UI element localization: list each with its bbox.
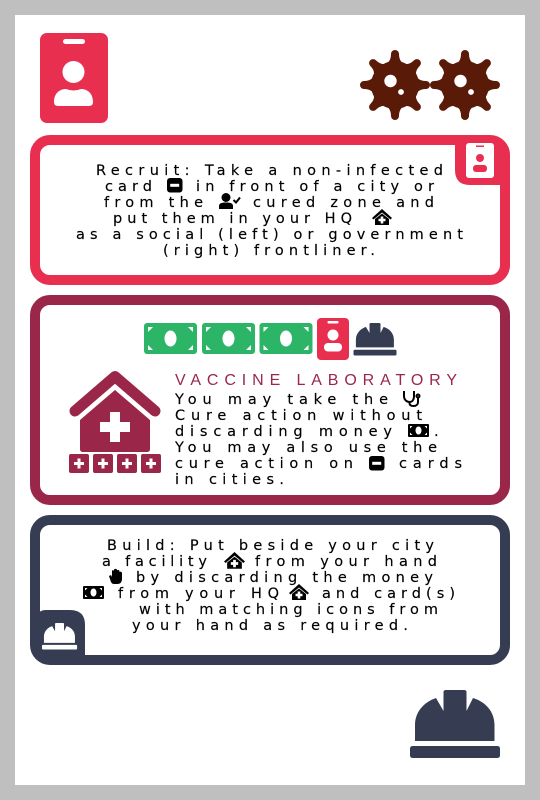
recruit text: Recruit: Take a non-infected (96, 163, 443, 179)
cost: helmet (354, 323, 397, 356)
panel: vaccine laboratory (35, 300, 505, 500)
recruit text: in front of a city or (196, 179, 434, 195)
recruit text: from the (104, 195, 203, 211)
panel: recruit (35, 140, 505, 280)
build text: Build: Put beside your city (107, 538, 434, 554)
recruit text (76, 163, 463, 259)
build text: a facility (102, 554, 207, 570)
vaccine text (174, 391, 462, 488)
vaccine text: cure action on (175, 456, 353, 472)
build text (83, 538, 455, 634)
icon: large helmet (410, 690, 500, 758)
vaccine text: in cities. (175, 472, 284, 488)
icon: recruit id badge (40, 33, 108, 123)
build text: from your HQ (118, 586, 279, 602)
build text: by discarding the money (136, 570, 433, 586)
tab with small id badge (455, 141, 504, 185)
recruit text: (right) frontliner. (163, 243, 375, 259)
panel: build (35, 520, 505, 660)
recruit text: as a social (left) or government (76, 227, 463, 243)
vaccine text: Cure action without (175, 408, 422, 424)
vaccine text: You may take the (174, 392, 388, 408)
tab with small helmet (36, 610, 85, 656)
heading: vaccine laboratory: VACCINE LABORATORY (175, 372, 457, 389)
build text: your hand as required. (132, 618, 408, 634)
icon: laboratory building (69, 376, 161, 473)
vaccine text: . (434, 424, 439, 440)
build text: from your hand (255, 554, 437, 570)
recruit text: card (105, 179, 152, 195)
cost: id badge (317, 318, 349, 360)
vaccine text: discarding money (175, 424, 392, 440)
cost: money bills (144, 323, 312, 354)
build text: with matching icons from (139, 602, 438, 618)
small plus tokens (69, 454, 161, 473)
recruit text: cured zone and (253, 195, 434, 211)
icon: two virus gears (360, 50, 500, 120)
vaccine text: You may also use the (174, 440, 437, 456)
vaccine text: cards (399, 456, 462, 472)
build text: and card(s) (322, 586, 455, 602)
recruit text: put them in your HQ (113, 211, 352, 227)
